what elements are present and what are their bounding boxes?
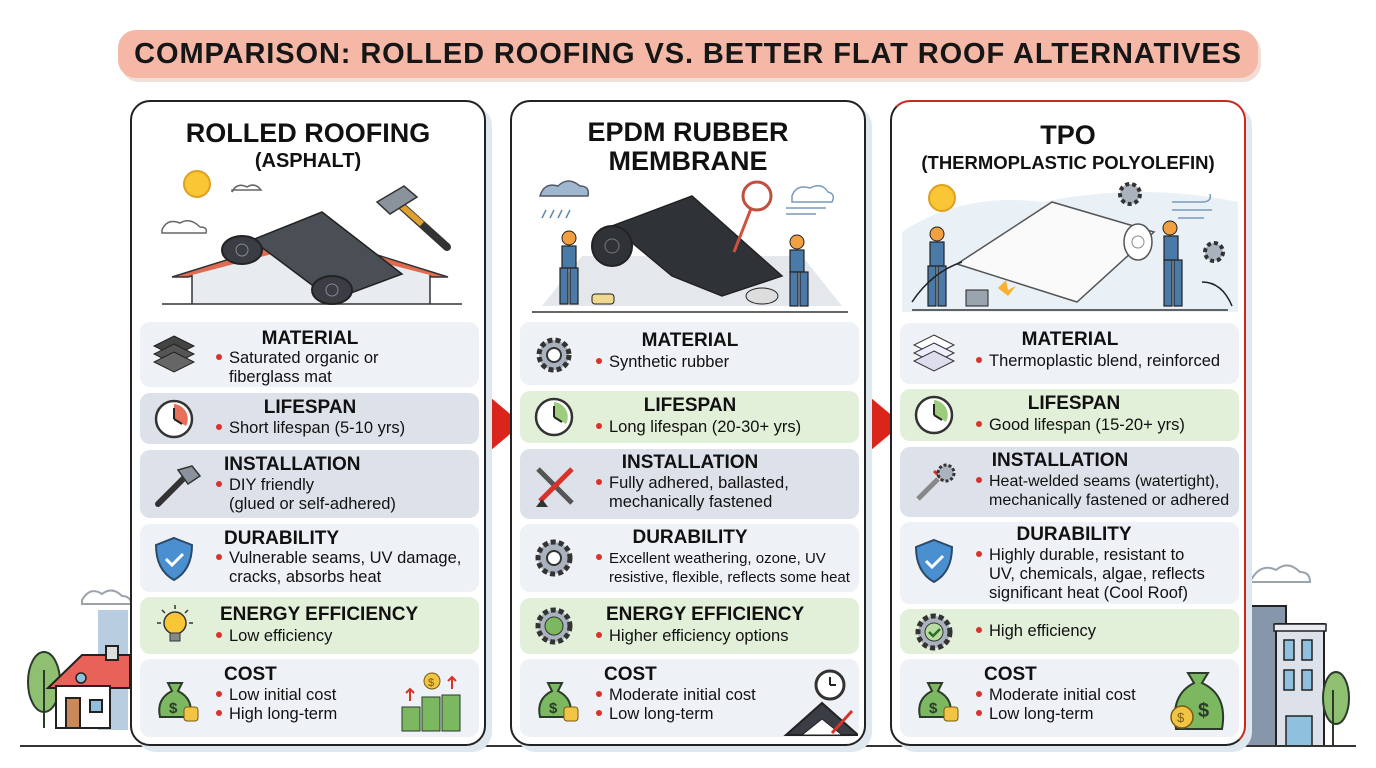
row: material: Saturated organic or: [229, 349, 379, 367]
row: energy efficiency: ENERGY EFFICIENCY: [220, 604, 418, 625]
icon: shield: [915, 538, 953, 584]
row: material: MATERIAL: [1022, 329, 1118, 350]
row: lifespan: LIFESPAN: [264, 397, 356, 418]
panel: tpo: [890, 100, 1246, 746]
icon: bulb: [157, 605, 193, 642]
row: energy efficiency: ENERGY EFFICIENCY: [606, 604, 804, 625]
row: material: MATERIAL: [642, 330, 738, 351]
subheading: asphalt: (ASPHALT): [255, 150, 361, 172]
icon: money bag: $: [929, 700, 938, 717]
arrow: panel 2 to 3: [872, 398, 890, 450]
row: energy efficiency: [140, 597, 479, 654]
icon: shield: [155, 536, 193, 582]
row: lifespan: Good lifespan (15-20+ yrs): [989, 416, 1185, 434]
title: [118, 30, 1258, 78]
row: durability: Excellent weathering, ozone, UV: [609, 550, 826, 567]
row: durability: cracks, absorbs heat: [229, 568, 381, 586]
row: material: [900, 323, 1239, 384]
row: durability: UV, chemicals, algae, reflects: [989, 565, 1205, 583]
row: material: [140, 322, 479, 387]
row: durability: DURABILITY: [224, 528, 339, 549]
row: cost: COST: [984, 664, 1037, 685]
row: energy efficiency: Higher efficiency options: [609, 627, 788, 645]
icon: white layers: [913, 334, 955, 372]
row: energy efficiency: [900, 609, 1239, 654]
row: durability: resistive, flexible, reflects some heat: [609, 569, 850, 586]
heading: epdm rubber membrane: MEMBRANE: [608, 146, 768, 176]
heading: epdm rubber membrane: EPDM RUBBER: [587, 117, 788, 147]
icon: house with clock: [784, 670, 858, 736]
row: installation: mechanically fastened: [609, 493, 772, 511]
icon: layers: [153, 336, 195, 372]
row: installation: [900, 447, 1239, 517]
row: durability: [140, 524, 479, 592]
row: cost: Low long-term: [609, 705, 714, 723]
row: cost: COST: [604, 664, 657, 685]
ground line: [20, 745, 1356, 747]
heading: tpo: TPO: [1040, 120, 1096, 150]
illustration: house with rolls: [161, 170, 462, 305]
row: material: [520, 322, 859, 385]
icon: money bag: [158, 682, 198, 722]
row: installation: (glued or self-adhered): [229, 495, 396, 513]
row: cost: [900, 659, 1239, 737]
icon: hammer: [155, 465, 201, 507]
row: cost: High long-term: [229, 705, 337, 723]
icon: money bag: $: [169, 700, 178, 717]
icon: clock green: [534, 398, 574, 436]
row: cost: [520, 659, 859, 737]
row: installation: [140, 450, 479, 518]
row: lifespan: LIFESPAN: [644, 395, 736, 416]
subheading: thermoplastic polyolefin: (THERMOPLASTIC POLYOLEFIN): [921, 152, 1215, 173]
background skyline right: [1247, 564, 1350, 745]
row: durability: significant heat (Cool Roof): [989, 584, 1188, 602]
icon: coin stacks rising: $: [428, 677, 434, 689]
row: energy efficiency: High efficiency: [989, 622, 1096, 640]
icon: large money bag with coin: [1170, 672, 1224, 730]
row: cost: COST: [224, 664, 277, 685]
icon: coin stacks rising: [402, 672, 460, 732]
background skyline left: [27, 589, 130, 730]
row: installation: INSTALLATION: [224, 454, 360, 475]
row: installation: INSTALLATION: [622, 452, 758, 473]
row: durability: Highly durable, resistant to: [989, 546, 1184, 564]
row: installation: [520, 449, 859, 519]
icon: gear with leaf: [536, 608, 572, 644]
icon: money bag: [538, 682, 578, 722]
row: installation: DIY friendly: [229, 476, 314, 494]
panel: epdm: [510, 100, 866, 746]
illustration: workers installing rubber roll: [532, 180, 848, 313]
icon: clock: [154, 400, 194, 438]
row: lifespan: Short lifespan (5-10 yrs): [229, 419, 405, 437]
row: cost: Moderate initial cost: [989, 686, 1136, 704]
row: durability: [520, 524, 859, 592]
row: lifespan: [900, 389, 1239, 441]
icon: clock green: [914, 396, 954, 434]
icon: gear: [536, 540, 572, 576]
icon: money bag: $: [549, 700, 558, 717]
row: durability: Vulnerable seams, UV damage,: [229, 549, 461, 567]
row: energy efficiency: [520, 598, 859, 654]
row: installation: INSTALLATION: [992, 450, 1128, 471]
row: cost: Low long-term: [989, 705, 1094, 723]
icon: wrench and gear: [916, 464, 956, 501]
row: installation: Fully adhered, ballasted,: [609, 474, 789, 492]
illustration: workers heat-welding white membrane: [902, 182, 1238, 312]
arrow: panel 1 to 2: [492, 398, 510, 450]
row: cost: Moderate initial cost: [609, 686, 756, 704]
row: lifespan: [520, 391, 859, 443]
row: installation: mechanically fastened or adhered: [989, 492, 1229, 509]
title: COMPARISON: ROLLED ROOFING VS. BETTER FLAT ROOF ALTERNATIVES: [134, 38, 1242, 70]
row: lifespan: Long lifespan (20-30+ yrs): [609, 418, 801, 436]
row: material: Synthetic rubber: [609, 353, 729, 371]
icon: large money bag with coin: $: [1198, 700, 1209, 722]
row: cost: [140, 659, 479, 737]
heading: rolled roofing: ROLLED ROOFING: [186, 118, 430, 148]
row: durability: [900, 522, 1239, 604]
icon: wrench and screwdriver: [536, 467, 574, 507]
icon: gear: [536, 338, 572, 372]
row: durability: DURABILITY: [632, 527, 748, 548]
icon: money bag: [918, 682, 958, 722]
panel: rolled roofing: [130, 100, 486, 746]
icon: gear with check: [916, 614, 952, 650]
row: installation: Heat-welded seams (watertight),: [989, 473, 1219, 490]
row: material: Thermoplastic blend, reinforced: [989, 352, 1220, 370]
row: energy efficiency: Low efficiency: [229, 627, 332, 645]
row: durability: DURABILITY: [1016, 524, 1132, 545]
row: cost: Low initial cost: [229, 686, 336, 704]
heading: epdm rubber membrane: [587, 117, 788, 176]
row: material: MATERIAL: [262, 328, 358, 349]
icon: large money bag with coin: $: [1177, 710, 1185, 725]
row: material: fiberglass mat: [229, 368, 332, 386]
row: lifespan: LIFESPAN: [1028, 393, 1120, 414]
row: lifespan: [140, 393, 479, 444]
